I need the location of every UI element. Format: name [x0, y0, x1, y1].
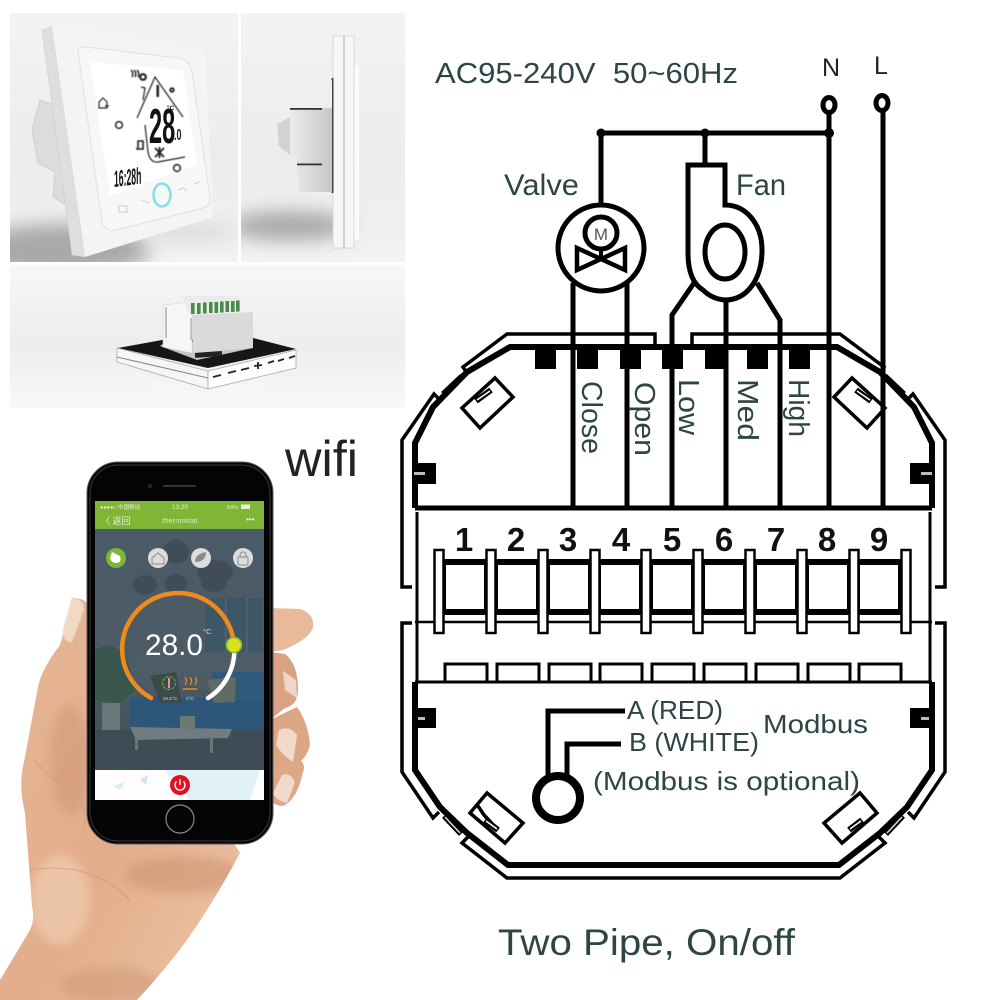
camera	[148, 484, 152, 488]
fan wires	[672, 283, 780, 508]
face plate	[52, 24, 213, 257]
fan label: Fan	[736, 169, 786, 202]
modbus B label: B (WHITE)	[629, 727, 759, 757]
home button	[166, 805, 194, 833]
valve wires	[573, 283, 627, 508]
floor temp icon: 0°C	[186, 696, 195, 702]
room temp icon: 19.5°C	[163, 696, 178, 702]
temperature gauge	[122, 593, 234, 698]
diagram title: Two Pipe, On/off	[498, 922, 796, 963]
terminal numbers: 9	[870, 521, 888, 558]
touch ring	[154, 184, 170, 206]
optional note: (Modbus is optional)	[593, 766, 860, 796]
terminal block	[415, 550, 932, 633]
back module	[32, 100, 66, 205]
unit: °C	[203, 627, 212, 636]
terminal numbers: 6	[715, 521, 733, 558]
photo panel: thermostat side view	[228, 13, 405, 262]
open label: Open	[628, 382, 660, 456]
wiring diagram	[402, 96, 945, 878]
divider band	[415, 506, 932, 510]
terminal numbers: 5	[663, 521, 681, 558]
screen background scene	[95, 529, 264, 770]
valve label: Valve	[504, 169, 579, 202]
corner clips top	[462, 378, 885, 428]
smartphone: 54%	[227, 505, 238, 511]
lower slots	[445, 664, 901, 682]
screen icons	[99, 70, 185, 171]
back plate	[333, 36, 354, 248]
neutral label: N	[822, 54, 840, 82]
green connectors	[191, 300, 240, 314]
floor temp icon	[183, 677, 197, 702]
voltage label: AC95-240V 50~60Hz	[435, 58, 738, 90]
plate edge	[42, 27, 85, 257]
photo panel: thermostat front view: .0	[174, 125, 181, 144]
corner clips bottom	[470, 793, 877, 843]
terminal numbers: 4	[612, 521, 631, 558]
vent slots	[213, 356, 295, 377]
rear housing	[163, 302, 192, 353]
terminal numbers: 2	[507, 521, 525, 558]
modbus label: Modbus	[763, 709, 868, 739]
speaker	[163, 485, 196, 487]
terminal numbers: 7	[767, 521, 785, 558]
junction dots	[596, 128, 834, 138]
live label: L	[874, 52, 888, 80]
clock digits: 16:28h	[114, 162, 141, 192]
photo panel: thermostat front view: °C	[167, 104, 175, 112]
modbus A label: A (RED)	[627, 695, 723, 725]
base glass top	[118, 338, 296, 368]
gauge knob	[226, 638, 242, 652]
room temp icon	[162, 676, 178, 702]
smartphone: thermostat	[162, 516, 199, 525]
thumb nail highlight	[63, 598, 84, 642]
valve M: M	[594, 225, 608, 244]
photo panel: thermostat front view	[10, 13, 238, 262]
app nav: 〈 返回	[101, 515, 131, 526]
top tabs	[535, 350, 810, 369]
hand holding phone	[0, 598, 313, 1000]
palm shading	[30, 705, 245, 1000]
controller outline bottom	[402, 623, 945, 878]
green header	[95, 501, 264, 529]
palm	[0, 598, 240, 1000]
close label: Close	[575, 381, 607, 454]
terminal numbers: 1	[455, 521, 473, 558]
rear module	[296, 80, 332, 192]
high label: High	[782, 379, 814, 437]
wifi label: wifi	[284, 431, 358, 487]
base right side	[208, 350, 296, 389]
valve symbol	[558, 205, 644, 291]
med label: Med	[731, 379, 763, 441]
terminal numbers: 8	[818, 521, 836, 558]
temperature value: 28.0	[145, 629, 203, 662]
photo panel: thermostat rear view	[10, 265, 405, 408]
power button	[170, 775, 190, 795]
silver mount	[160, 342, 253, 360]
temperature digits: 28	[149, 100, 175, 154]
phone body	[87, 462, 273, 844]
white footer	[95, 770, 264, 800]
smartphone: ●●●●○ 中国移动	[100, 503, 141, 511]
base left side	[117, 348, 208, 389]
fingers	[270, 608, 313, 652]
mode icons	[106, 548, 253, 568]
fan symbol	[688, 165, 762, 300]
modbus connector	[536, 711, 625, 820]
terminal numbers	[455, 521, 888, 558]
status text: 13:20	[172, 504, 189, 511]
finger nails	[283, 671, 297, 698]
smartphone	[87, 462, 273, 844]
controller outline top	[402, 334, 945, 587]
supply wires	[601, 111, 883, 508]
terminal rings	[823, 96, 888, 112]
smartphone: •••	[246, 515, 255, 524]
bezel	[78, 47, 210, 230]
terminal numbers: 3	[559, 521, 577, 558]
lit screen	[90, 62, 197, 196]
low label: Low	[672, 379, 704, 436]
side clips	[412, 463, 934, 728]
